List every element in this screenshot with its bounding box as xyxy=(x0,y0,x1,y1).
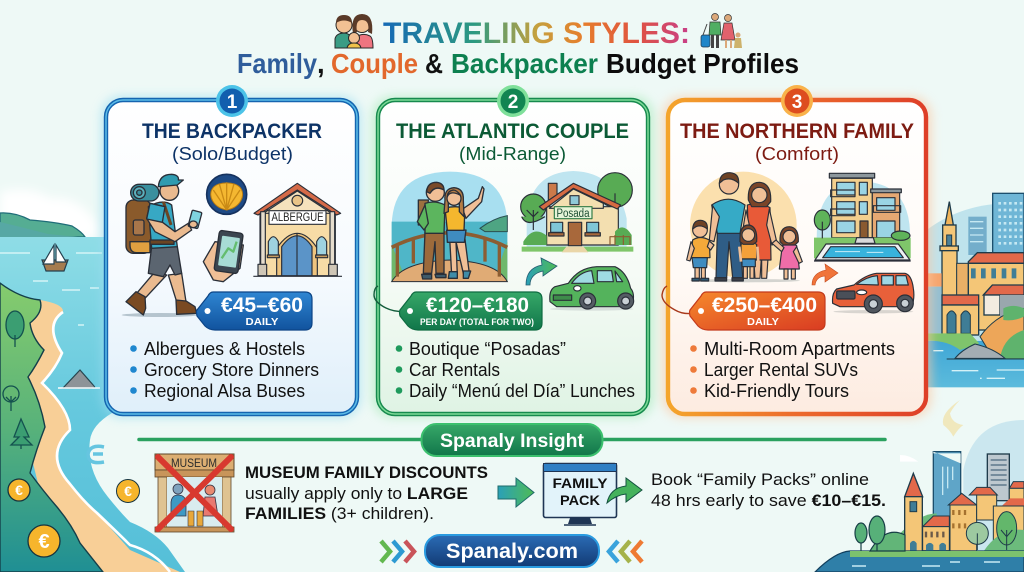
subheading: (Solo/Budget) xyxy=(172,144,293,164)
title line 2: & xyxy=(425,48,443,79)
left chevrons xyxy=(381,541,414,562)
bullet list: Boutique “Posadas” xyxy=(409,339,566,359)
title line 2: Backpacker xyxy=(451,48,598,79)
icon: museum crossed out: MUSEUM xyxy=(171,456,217,470)
price tag xyxy=(196,292,312,330)
bullet list: Larger Rental SUVs xyxy=(704,360,858,380)
number badge 2: 2 xyxy=(508,92,518,113)
grass xyxy=(927,333,979,350)
terraces xyxy=(927,273,942,287)
title line 2 xyxy=(237,48,799,79)
price tag: PER DAY (TOTAL FOR TWO) xyxy=(420,317,534,328)
coins: € xyxy=(38,531,50,553)
footer: spanaly.com xyxy=(381,535,642,567)
sign label: ALBERGUE xyxy=(272,210,324,224)
rock xyxy=(63,370,95,388)
website pill: Spanaly.com xyxy=(446,540,578,563)
icon: family pack website: PACK xyxy=(560,492,600,508)
section: spanaly insight xyxy=(139,424,886,532)
bottom city blob xyxy=(963,420,1024,553)
price tag: DAILY xyxy=(747,316,779,328)
illustration: couple on a bridge xyxy=(392,172,507,282)
bullet list xyxy=(130,339,319,401)
tip text: museum discounts xyxy=(245,464,488,523)
crescent xyxy=(943,400,963,437)
arrow xyxy=(526,258,557,285)
heading: THE ATLANTIC COUPLE xyxy=(396,120,629,143)
waterfront xyxy=(815,551,1024,572)
sea xyxy=(0,237,185,572)
icon: phone with map in hand xyxy=(203,230,243,282)
price tag: DAILY xyxy=(246,316,278,328)
illustration: orange suv xyxy=(832,273,914,313)
tag string xyxy=(662,286,700,314)
swirl xyxy=(88,446,104,463)
distant hills xyxy=(927,203,1024,340)
panel: the backpacker xyxy=(101,85,361,418)
scenery: right cities xyxy=(815,193,1024,572)
subheading: (Mid-Range) xyxy=(459,144,566,164)
price tag xyxy=(690,292,825,330)
bullet list: Albergues & Hostels xyxy=(144,339,305,359)
hill xyxy=(980,308,1024,358)
sign label: Posada xyxy=(556,208,590,220)
price tag xyxy=(400,292,542,330)
title line 2: Budget Profiles xyxy=(606,48,799,79)
icon: family pack website: FAMILY xyxy=(552,475,608,491)
tip text: museum discounts: MUSEUM FAMILY DISCOUNTS xyxy=(245,464,488,482)
bullet list: Regional Alsa Buses xyxy=(144,381,305,401)
title line 2: , xyxy=(317,48,325,79)
glass tower xyxy=(993,193,1024,257)
heading: THE BACKPACKER xyxy=(142,120,322,143)
title line 1: TRAVELING STYLES: xyxy=(383,17,690,50)
title xyxy=(237,14,799,79)
tip text: book early: 48 hrs early to save €10–€15. xyxy=(651,492,886,510)
icon: family with luggage xyxy=(701,14,742,48)
panel: the atlantic couple xyxy=(372,85,654,418)
title line 2: Couple xyxy=(331,48,418,79)
bell tower xyxy=(945,202,953,225)
cloud xyxy=(0,190,98,238)
insight badge xyxy=(422,424,602,456)
tip text: museum discounts: usually apply only to LARGE xyxy=(245,485,468,503)
icon: family portrait xyxy=(335,14,373,48)
arrow xyxy=(607,478,642,503)
icon: museum crossed out xyxy=(155,454,234,532)
bullet list: Kid-Friendly Tours xyxy=(704,381,849,401)
land xyxy=(0,283,103,572)
heading: THE NORTHERN FAMILY xyxy=(680,120,914,143)
icon: family pack website xyxy=(544,464,616,525)
long building xyxy=(968,253,1024,263)
coins: € xyxy=(124,483,132,499)
houses xyxy=(923,516,949,527)
subheading: (Comfort) xyxy=(755,144,839,164)
island hill xyxy=(0,213,85,237)
right chevrons xyxy=(609,541,642,562)
website pill xyxy=(425,535,599,567)
trees xyxy=(3,311,32,449)
number badge 2 xyxy=(497,85,529,117)
number badge 1 xyxy=(216,85,248,117)
number badge 3: 3 xyxy=(792,92,802,113)
arcade xyxy=(942,295,979,305)
illustration: posada xyxy=(521,171,633,252)
illustration: family of five xyxy=(687,172,802,282)
price tag: €45–€60 xyxy=(221,293,303,317)
coins xyxy=(8,479,140,557)
bottom tower xyxy=(905,473,923,497)
tip text: museum discounts: FAMILIES (3+ children). xyxy=(245,505,434,523)
coins: € xyxy=(15,482,23,498)
icon: albergue building xyxy=(253,183,342,276)
tag string xyxy=(374,286,411,312)
waterfront trees xyxy=(855,516,905,551)
illustration: hiker xyxy=(122,174,202,317)
bullet list: Car Rentals xyxy=(409,360,500,380)
arrow xyxy=(812,264,838,285)
title line 2: Family xyxy=(237,48,318,79)
price tag: €120–€180 xyxy=(426,293,529,317)
bullet list: Multi-Room Apartments xyxy=(704,339,895,359)
water xyxy=(927,341,1024,387)
white house xyxy=(983,285,1024,295)
number badge 3 xyxy=(781,85,813,117)
scenery: left coast xyxy=(0,190,185,572)
insight badge: Spanaly Insight xyxy=(440,431,585,452)
bullet list: Grocery Store Dinners xyxy=(144,360,319,380)
tip text: book early: Book “Family Packs” online xyxy=(651,471,869,489)
bullet list xyxy=(690,339,895,401)
tip text: book early xyxy=(651,471,886,510)
illustration: green car xyxy=(550,267,634,311)
sailboat xyxy=(42,245,68,271)
illustration: apartment with pool xyxy=(814,173,911,261)
icon: scallop shell xyxy=(207,174,247,214)
panel: the northern family xyxy=(662,85,932,418)
bullet list xyxy=(396,339,635,401)
bullet list: Daily “Menú del Día” Lunches xyxy=(409,381,635,401)
sand xyxy=(0,300,180,572)
number badge 1: 1 xyxy=(227,92,238,113)
arrow xyxy=(498,478,534,507)
price tag: €250–€400 xyxy=(712,293,817,317)
